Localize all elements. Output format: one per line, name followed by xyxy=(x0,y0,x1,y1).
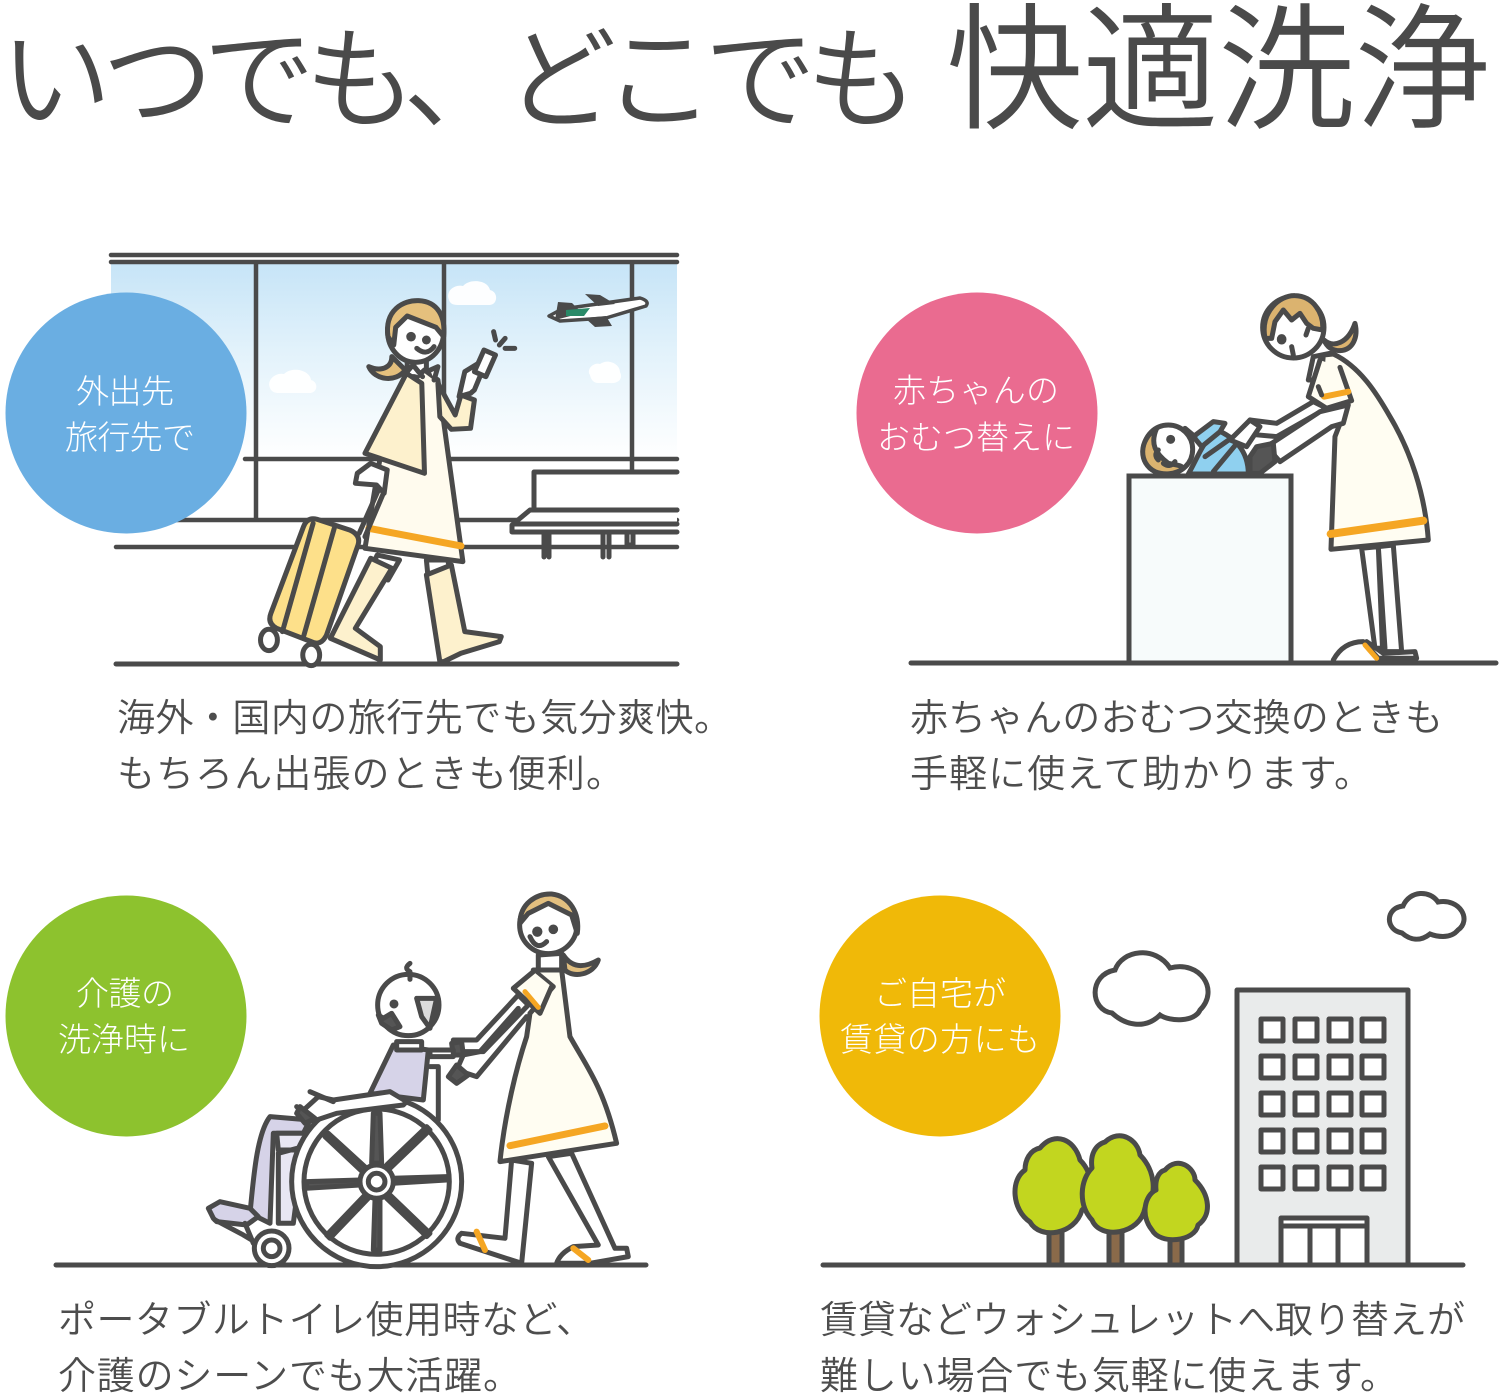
woman pushing wheelchair xyxy=(208,894,628,1267)
panel: travel xyxy=(111,255,677,666)
circle badge: outing xyxy=(6,292,246,534)
woman and baby xyxy=(1143,296,1428,660)
text: travel description: 海外・国内の旅行先でも気分爽快。 xyxy=(117,698,732,740)
text: diaper description xyxy=(910,698,1443,796)
panel: rental home xyxy=(823,893,1464,1265)
circle badge: nursing: 洗浄時に xyxy=(58,1021,190,1058)
text: travel description: もちろん出張のときも便利。 xyxy=(117,754,624,796)
text: nursing description: ポータブルトイレ使用時など、 xyxy=(58,1300,594,1342)
circle badge: diaper: 赤ちゃんの xyxy=(893,372,1059,409)
circle badge: outing: 旅行先で xyxy=(65,419,195,456)
circle badge: diaper: おむつ替えに xyxy=(877,419,1075,456)
circle badge: nursing: 介護の xyxy=(76,975,174,1012)
circle badge: rental: ご自宅が xyxy=(874,975,1006,1012)
text: rental description: 賃貸などウォシュレットへ取り替えが xyxy=(820,1300,1465,1342)
ground line xyxy=(116,662,677,666)
airplane xyxy=(549,294,647,327)
circle badge: nursing xyxy=(6,896,246,1136)
circle badge: rental: 賃貸の方にも xyxy=(840,1021,1040,1058)
text: travel description xyxy=(117,698,732,796)
circle badge: outing: 外出先 xyxy=(76,373,174,410)
circle badge: diaper xyxy=(856,292,1098,534)
title xyxy=(0,0,1491,148)
text: diaper description: 赤ちゃんのおむつ交換のときも xyxy=(910,698,1443,740)
text: rental description: 難しい場合でも気軽に使えます。 xyxy=(820,1356,1398,1397)
text: nursing description xyxy=(58,1300,594,1397)
text: diaper description: 手軽に使えて助かります。 xyxy=(910,754,1372,796)
text: nursing description: 介護のシーンでも大活躍。 xyxy=(58,1356,521,1397)
circle badge: rental xyxy=(820,896,1060,1136)
panel: diaper change xyxy=(911,296,1496,663)
cloud small xyxy=(1389,893,1464,939)
ground line xyxy=(56,1262,646,1268)
bench xyxy=(512,472,677,557)
cloud large xyxy=(1095,953,1208,1024)
ground line xyxy=(823,1262,1463,1268)
panel: nursing care xyxy=(56,894,646,1267)
title: いつでも、どこでも xyxy=(0,18,918,143)
ground line xyxy=(911,660,1496,666)
woman with suitcase xyxy=(261,301,515,666)
text: rental description xyxy=(820,1300,1465,1397)
airport window scene xyxy=(111,255,677,547)
changing table xyxy=(1129,476,1291,663)
building xyxy=(1237,990,1408,1265)
trees xyxy=(1015,1136,1207,1265)
